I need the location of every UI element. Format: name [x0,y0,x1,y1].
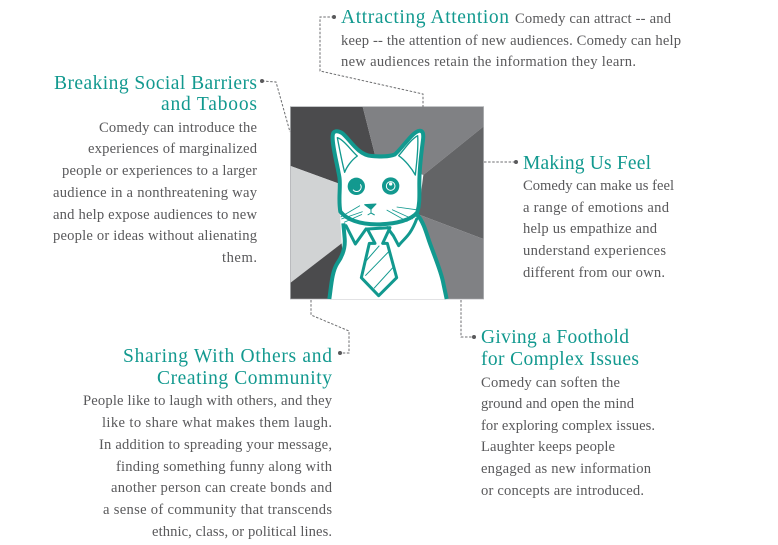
text block: sharing with others and creating community: In addition to spreading your message, [99,437,332,453]
nose and whiskers [365,204,376,215]
leader line: breaking barriers [260,79,290,132]
text block: giving a foothold for complex issues: engaged as new information [481,461,652,477]
text block: giving a foothold for complex issues: for exploring complex issues. [481,418,655,434]
text block: giving a foothold for complex issues: Laughter keeps people [481,439,615,455]
text block: making us feel: different from our own. [523,265,665,281]
text block: sharing with others and creating community: Sharing With Others and [123,346,332,367]
text block: breaking social barriers and taboos: people or ideas without alienating [53,228,258,244]
leader line: sharing with others [311,300,349,355]
text block: sharing with others and creating community: like to share what makes them laugh. [102,415,332,431]
text block: breaking social barriers and taboos [53,73,258,266]
text block: making us feel: Comedy can make us feel [523,178,674,194]
text block: giving a foothold for complex issues [481,327,655,499]
illustration: cat in a tie on a grey sunburst [290,107,484,299]
text block: attracting attention: Attracting Attention [341,7,509,28]
eyes [348,178,365,195]
text block: breaking social barriers and taboos: Breaking Social Barriers [54,73,257,94]
leader line: attracting attention [320,15,423,107]
text block: breaking social barriers and taboos: people or experiences to a larger [62,163,257,179]
text block: sharing with others and creating community: finding something funny along with [116,459,333,475]
text block: sharing with others and creating community: Creating Community [157,368,332,389]
text block: breaking social barriers and taboos: them. [222,250,257,266]
text block: giving a foothold for complex issues: ground and open the mind [481,396,635,412]
text block: breaking social barriers and taboos: Comedy can introduce the [99,120,257,136]
text block: making us feel: Making Us Feel [523,153,652,174]
text block: attracting attention: keep -- the attention of new audiences. Comedy can help [341,33,681,49]
text block: sharing with others and creating community: a sense of community that transcends [103,502,332,518]
text block: breaking social barriers and taboos: and help expose audiences to new [53,207,257,223]
text block: breaking social barriers and taboos: experiences of marginalized [88,141,258,157]
cat head [333,131,423,224]
text block: making us feel [523,153,674,281]
text block: making us feel: understand experiences [523,243,666,259]
text block: sharing with others and creating community: People like to laugh with others, and they [83,393,333,409]
leader line: making us feel [484,160,518,164]
collar [346,219,417,246]
text block: attracting attention [341,7,681,70]
text block: sharing with others and creating community: another person can create bonds and [111,480,333,496]
text block: making us feel: a range of emotions and [523,200,670,216]
text block: attracting attention: new audiences retain the information they learn. [341,54,636,70]
cat body [329,215,447,299]
tie [361,228,397,296]
text block: giving a foothold for complex issues: or concepts are introduced. [481,483,644,499]
text block: attracting attention: Comedy can attract -- and [515,11,672,27]
text block: giving a foothold for complex issues: Comedy can soften the [481,375,620,391]
text block: sharing with others and creating community: ethnic, class, or political lines. [152,524,332,540]
text block: giving a foothold for complex issues: Giving a Foothold [481,327,629,348]
text block: breaking social barriers and taboos: audience in a nonthreatening way [53,185,258,201]
text block: breaking social barriers and taboos: and Taboos [161,94,257,115]
leader line: giving a foothold [461,300,476,339]
text block: sharing with others and creating community [83,346,333,540]
text block: making us feel: help us empathize and [523,221,658,237]
text block: giving a foothold for complex issues: for Complex Issues [481,349,639,370]
inner ears [337,138,357,172]
